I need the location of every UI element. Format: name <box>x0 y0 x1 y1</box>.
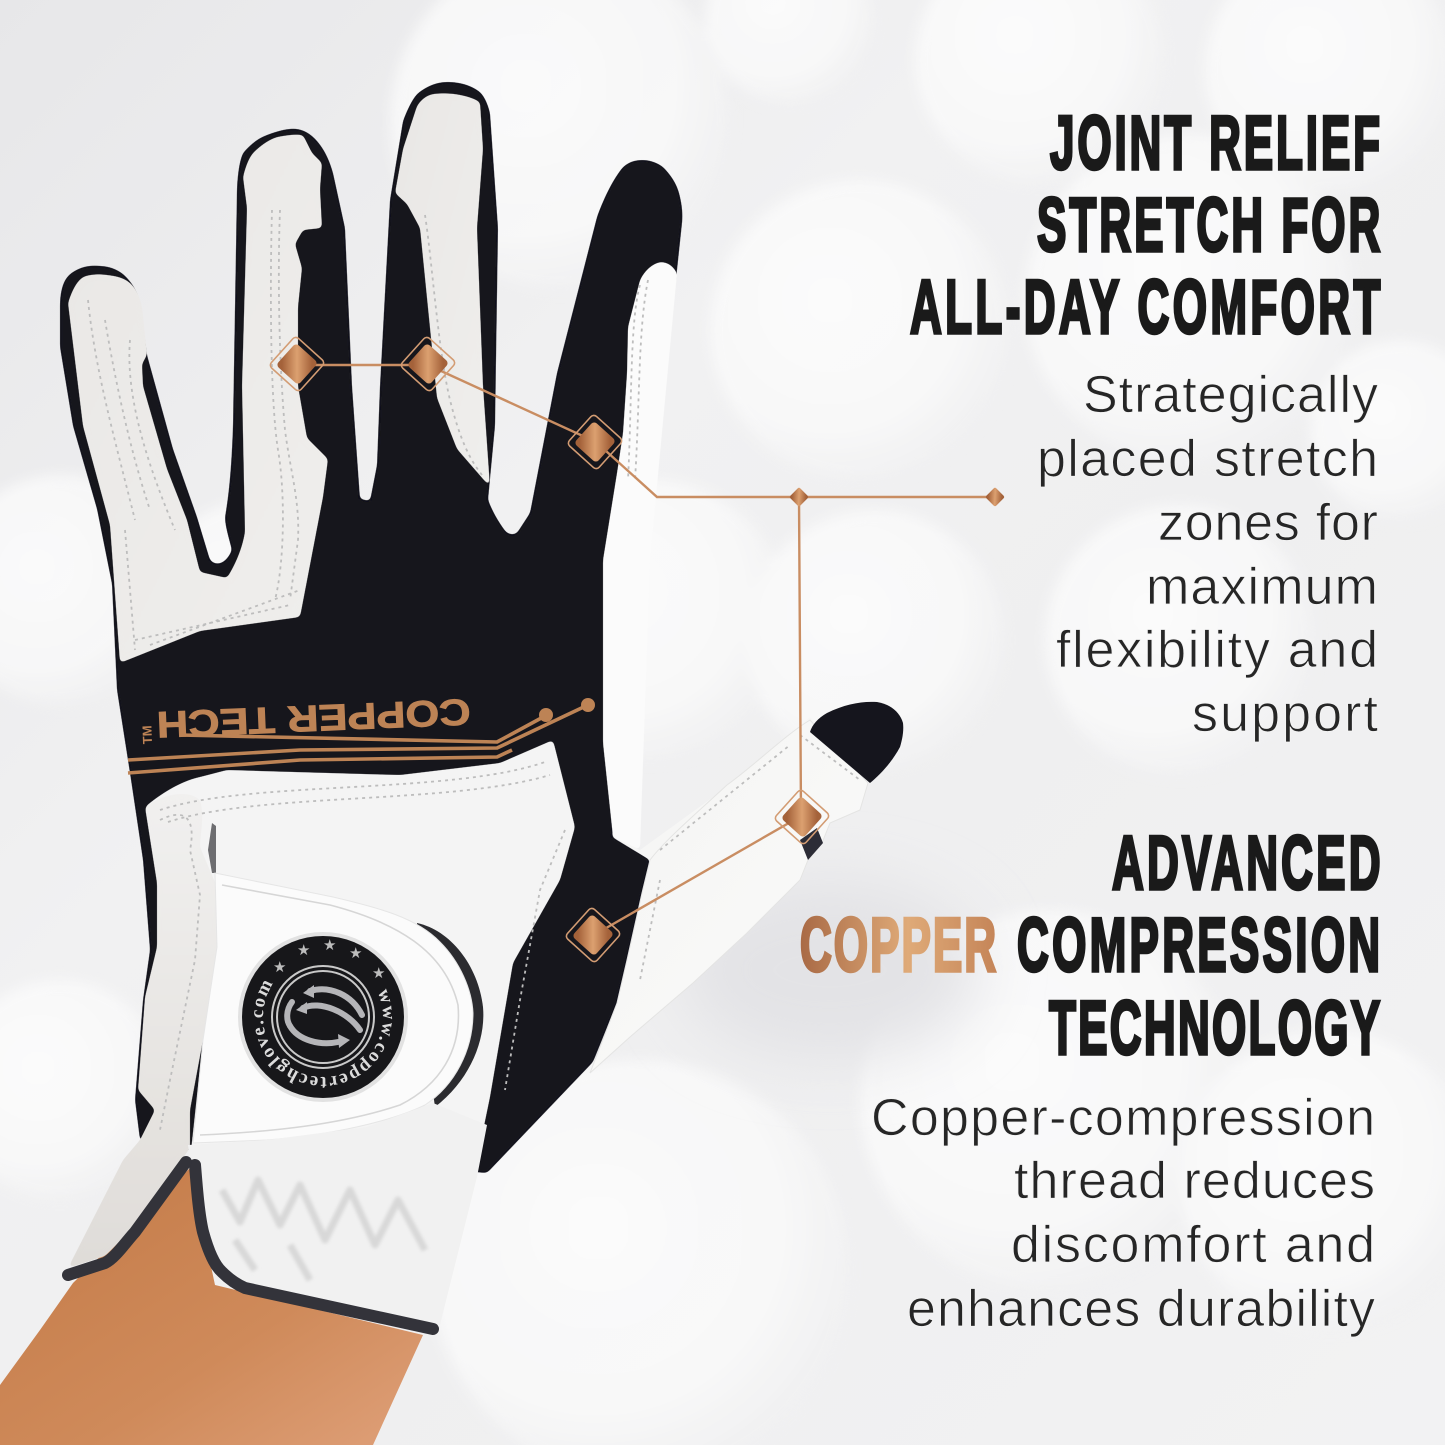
wrist leather <box>188 1103 487 1325</box>
ball marker badge <box>238 932 408 1102</box>
golf glove <box>60 82 904 1335</box>
folded tab left <box>68 794 217 1268</box>
text: copper compression description: enhances durability <box>907 1280 1375 1338</box>
badge arrows <box>287 989 362 1043</box>
text: joint relief description: maximum <box>1146 558 1378 616</box>
palm side white strip <box>603 262 677 850</box>
copper callout connector lines <box>300 365 994 935</box>
marker: thumb joint <box>774 789 830 845</box>
badge url text: www.coppertechglove.com <box>254 981 392 1088</box>
heading: joint relief: ALL-DAY COMFORT <box>910 266 1380 350</box>
palm lower leather <box>145 740 575 1160</box>
upper thumb web <box>613 717 828 860</box>
stitching <box>88 210 860 1130</box>
text: copper compression description: Copper-compression <box>871 1089 1375 1147</box>
text: copper compression description <box>871 1089 1375 1338</box>
wrist texture <box>222 1180 425 1280</box>
marker: palm joint <box>565 907 621 963</box>
glove black stretch base <box>60 82 682 1173</box>
wrist trim black <box>68 1162 433 1329</box>
dark fold notch <box>208 823 216 873</box>
marker: index finger joint <box>567 414 623 470</box>
text: joint relief description: placed stretch <box>1037 430 1378 488</box>
marker: middle finger joint <box>400 336 456 392</box>
middle finger leather <box>395 93 490 487</box>
text: joint relief description: Strategically <box>1083 366 1378 424</box>
badge stars: ★ <box>323 936 336 954</box>
trademark symbol: TM <box>139 725 155 744</box>
white closure strap <box>193 873 473 1143</box>
copper circuit lines <box>128 704 590 773</box>
heading: advanced copper compression technology <box>800 822 1381 1071</box>
marker: ring finger joint <box>269 336 325 392</box>
heading: advanced copper compression technology: COMPRESSION <box>1017 904 1380 988</box>
grey shade beside thumb <box>680 880 980 1060</box>
badge stars: ★ <box>349 944 362 962</box>
heading: advanced copper compression technology: ADVANCED <box>1112 822 1381 906</box>
heading: joint relief: JOINT RELIEF <box>1050 102 1380 186</box>
joint markers <box>269 336 1005 963</box>
text: copper compression description: discomfort and <box>1011 1216 1375 1274</box>
heading: joint relief <box>910 102 1380 350</box>
badge stars: ★ <box>273 958 286 976</box>
pinky and ring finger leather <box>68 135 328 663</box>
velcro mesh under strap <box>417 923 483 1107</box>
heading: joint relief: STRETCH FOR <box>1037 184 1380 268</box>
strap inner stitch line <box>200 885 458 1135</box>
thumb seam <box>800 828 823 860</box>
text: joint relief description: zones for <box>1158 494 1378 552</box>
copper tech logo text: COPPER TECH <box>156 691 471 745</box>
small junction node <box>789 487 809 507</box>
text: joint relief description: support <box>1192 685 1379 743</box>
badge stars: ★ <box>297 941 310 959</box>
text: copper compression description: thread reduces <box>1014 1152 1375 1210</box>
badge arrow heads <box>296 985 350 1048</box>
heading: advanced copper compression technology: COPPER <box>800 904 996 988</box>
text: joint relief description <box>1037 366 1379 743</box>
text: joint relief description: flexibility and <box>1056 621 1378 679</box>
small end node <box>985 487 1005 507</box>
badge stars: ★ <box>372 964 385 982</box>
thumb tip <box>810 702 903 783</box>
heading: advanced copper compression technology: TECHNOLOGY <box>1049 987 1380 1071</box>
forearm <box>0 1168 423 1445</box>
circuit end dots <box>539 698 595 722</box>
thumb leather <box>590 720 868 1073</box>
